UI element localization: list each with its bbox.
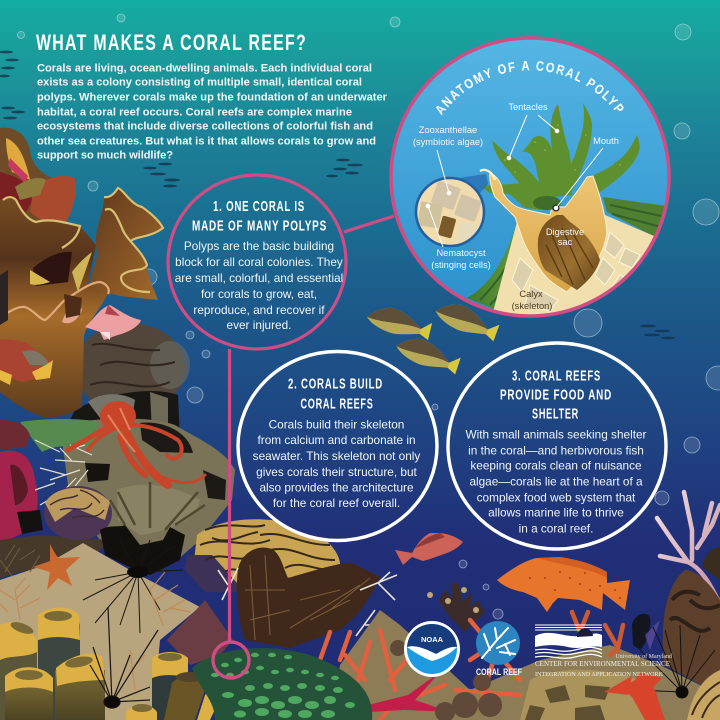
panel: 2 corals build coral reefs: CORAL REEFS — [300, 396, 374, 412]
brain coral: centre — [185, 519, 342, 598]
panel: 3 coral reefs provide food and shelter: With small animals seeking shelter — [466, 428, 647, 442]
intro text: exists as a colony consisting of multiple small, identical coral — [37, 76, 362, 88]
panel: 3 coral reefs provide food and shelter: allows marine life to thrive — [488, 506, 624, 520]
ground: lower middle and right — [330, 610, 720, 720]
orange fan corals on sand — [0, 572, 190, 690]
polyp labels — [413, 102, 619, 311]
inset: nematocyst close-up — [416, 178, 484, 250]
panel: 1 one coral is made of many polyps — [168, 175, 346, 349]
panel: 2 corals build coral reefs: seawater. This skeleton not only — [253, 449, 420, 463]
leader lines — [426, 115, 603, 247]
logo: university of maryland center for environmental science — [535, 625, 672, 678]
coral: magenta and green mound — [0, 419, 110, 578]
polyp labels: Tentacles — [508, 102, 548, 112]
logo: coral reef conservation — [476, 621, 522, 677]
purple fan coral — [167, 600, 233, 665]
tentacles — [480, 103, 640, 210]
panel: 2 corals build coral reefs: for the coral reef overall. — [273, 496, 400, 510]
fish: red snapper — [395, 533, 463, 565]
panel: 1 one coral is made of many polyps: MADE OF MANY POLYPS — [192, 218, 327, 234]
shadowed fans at left floor — [0, 545, 40, 576]
panel: 3 coral reefs provide food and shelter: algae—corals lie at the heart of a — [469, 474, 643, 488]
panel: 3 coral reefs provide food and shelter: in the coral—and herbivorous fish — [468, 444, 644, 458]
pale brown rock clusters — [390, 640, 502, 720]
polyp labels: (skeleton) — [512, 301, 552, 311]
dark and purple silhouettes — [632, 614, 660, 650]
right side: pale pink branching coral — [657, 492, 720, 600]
fan coral: dark cluster — [427, 582, 485, 632]
sea urchin: right — [635, 625, 715, 698]
crimson coral — [368, 672, 450, 712]
fish: yellow school — [367, 302, 501, 375]
coral: large brown plate coral — [0, 188, 163, 417]
panel: 3 coral reefs provide food and shelter: complex food web system that — [477, 490, 636, 504]
intro text: ecosystems that include diverse collections of colorful fish and — [37, 120, 373, 132]
polyp labels: Digestive — [546, 227, 584, 237]
panel: 3 coral reefs provide food and shelter: SHELTER — [532, 406, 579, 422]
panel: 1 one coral is made of many polyps: Polyps are the basic building — [184, 239, 334, 253]
mottled sand coral bottom right — [520, 670, 655, 720]
panel: 2 corals build coral reefs: gives corals their structure, but — [256, 465, 418, 479]
polyp labels: Zooxanthellae — [419, 125, 477, 135]
logo: NOAA — [404, 621, 460, 677]
polyp illustration — [459, 103, 664, 314]
title: WHAT MAKES A CORAL REEF? — [36, 30, 307, 55]
panel: 2 corals build coral reefs: also provides the architecture — [259, 480, 414, 494]
panel: 3 coral reefs provide food and shelter: in a coral reef. — [519, 522, 593, 536]
dark rock below fan — [60, 391, 180, 470]
fish: pink snapper — [85, 305, 141, 340]
inset beam — [459, 174, 488, 193]
panel: 3 coral reefs provide food and shelter: PROVIDE FOOD AND — [500, 386, 612, 404]
intro text: Corals are living, ocean-dwelling animals. Each individual coral — [37, 62, 372, 74]
intro text: support so much wildlife? — [37, 150, 173, 162]
panel: 3 coral reefs provide food and shelter — [448, 343, 666, 549]
brain coral: bottom right — [687, 670, 720, 720]
coral: white branching — [35, 440, 92, 505]
panel: 1 one coral is made of many polyps: for corals to grow, eat, — [201, 287, 317, 301]
tube sponges — [0, 608, 222, 720]
rock mass behind octopus — [60, 419, 235, 562]
brain coral: left — [44, 486, 112, 540]
hook of polyp mouth — [480, 170, 495, 180]
logo: university of maryland center for environmental science: INTEGRATION AND APPLICATION NETWORK — [535, 671, 663, 678]
gorgonian fan behind pink fish — [75, 323, 190, 413]
logo: NOAA: NOAA — [421, 635, 444, 644]
panel: 1 one coral is made of many polyps: ever injured. — [227, 318, 291, 332]
panel: 1 one coral is made of many polyps: are small, colorful, and essential — [175, 271, 343, 285]
logo: university of maryland center for environmental science: University of Maryland — [615, 653, 672, 660]
octopus — [68, 401, 205, 485]
pointer lines: polyp circle to callout one and callout to coral — [213, 216, 394, 678]
coral: top left cluster — [0, 128, 76, 223]
intro text: polyps. Wherever corals make up the foundation of an underwater — [37, 92, 388, 104]
logo: coral reef conservation: CORAL REEF — [476, 667, 522, 677]
panel: 1 one coral is made of many polyps: reproduce, and recover if — [193, 303, 325, 317]
intro text: other sea creatures. But what is it that allows corals to grow and — [37, 136, 376, 148]
panel: 2 corals build coral reefs: from calcium and carbonate in — [257, 433, 416, 447]
panel: anatomy of a coral polyp — [389, 36, 671, 318]
intro text: habitat, a coral reef occurs. Coral reefs are complex marine — [37, 106, 352, 118]
sea urchin: lower — [90, 607, 158, 708]
panel: 3 coral reefs provide food and shelter: 3. CORAL REEFS — [512, 368, 601, 384]
polyp labels: Calyx — [519, 289, 543, 299]
logo: university of maryland center for environmental science: CENTER FOR ENVIRONMENTAL SCIENCE — [535, 659, 670, 668]
dark plant silhouette — [100, 482, 205, 575]
polyp labels: sac — [558, 237, 573, 247]
starfish — [33, 544, 80, 590]
green star coral — [192, 648, 372, 720]
polyp circle rim — [391, 38, 669, 316]
panel: 2 corals build coral reefs: Corals build their skeleton — [269, 418, 404, 432]
polyp labels: Mouth — [593, 136, 619, 146]
polyp labels: Nematocyst — [436, 248, 486, 258]
right side: brown sponge — [663, 547, 720, 695]
white branches — [218, 568, 397, 636]
red-orange coral branches — [320, 612, 623, 720]
panel: 2 corals build coral reefs: 2. CORALS BUILD — [288, 376, 383, 392]
polyp labels: (symbiotic algae) — [413, 137, 483, 147]
distant fish schools — [0, 51, 675, 339]
sand floor — [0, 543, 200, 720]
fish: orange grouper — [497, 557, 630, 612]
polyp labels: (stinging cells) — [431, 260, 491, 270]
panel: 2 corals build coral reefs — [238, 352, 437, 540]
panel heading: anatomy: ANATOMY OF A CORAL POLYP — [436, 61, 624, 116]
panel: 1 one coral is made of many polyps: block for all coral colonies. They — [175, 255, 343, 269]
panel: 3 coral reefs provide food and shelter: keeping corals clean of nuisance — [470, 458, 642, 472]
panel: 1 one coral is made of many polyps: 1. ONE CORAL IS — [213, 198, 305, 215]
dark fan corals — [237, 547, 380, 648]
red anemone — [604, 672, 665, 720]
intro text — [37, 62, 388, 162]
sea urchin: large — [83, 540, 183, 633]
